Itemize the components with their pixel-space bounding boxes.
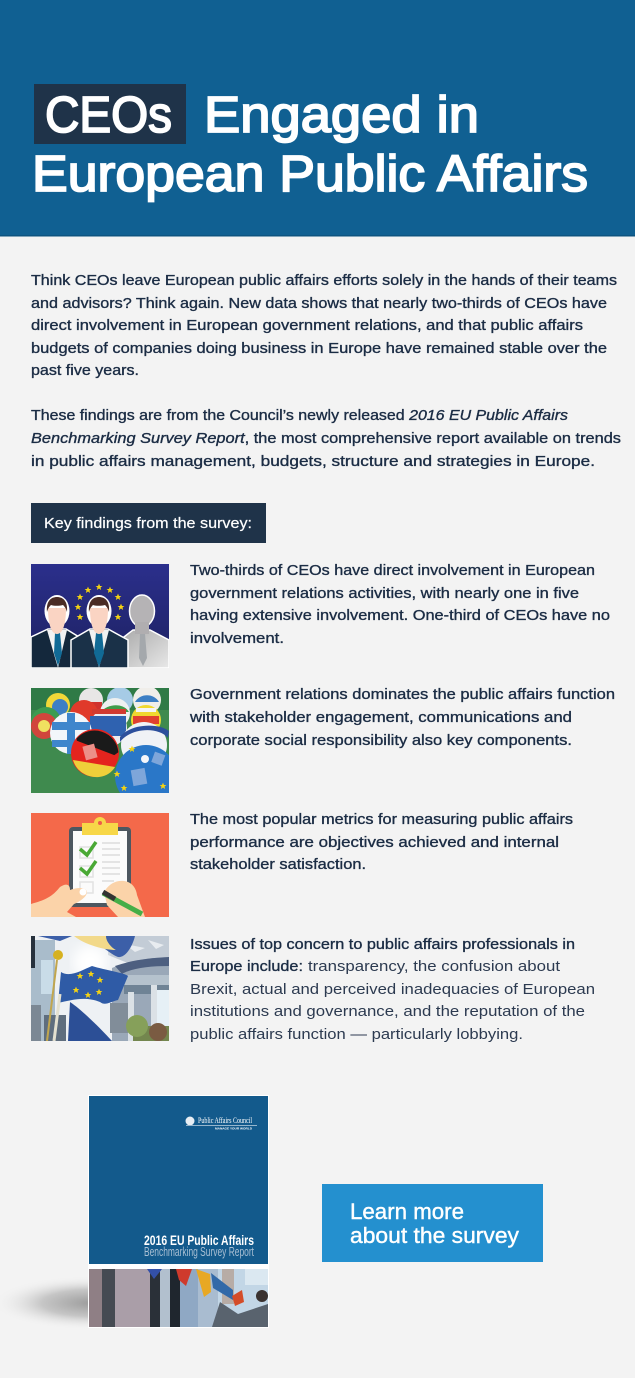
image: flag balls — [31, 688, 169, 793]
right hand — [104, 881, 145, 917]
text: government relations: corporate social responsibility also key components. — [190, 732, 572, 749]
report title — [144, 1233, 254, 1259]
text: metrics: performance are objectives achieved and internal — [190, 834, 559, 851]
title: CEOs — [45, 86, 172, 143]
header banner — [0, 0, 635, 236]
flag lower — [68, 1002, 112, 1041]
text: issues of concern: Brexit, actual and perceived inadequacies of European — [190, 981, 595, 998]
intro paragraph: budgets of companies doing business in Europe have remained stable over the — [31, 340, 607, 357]
text: CEO involvement: involvement. — [190, 630, 284, 647]
report cover — [88, 1095, 269, 1328]
key findings heading — [31, 503, 266, 543]
CEO centre — [71, 595, 128, 668]
intro paragraph: past five years. — [31, 362, 139, 379]
text: issues of concern: Issues of top concern to public affairs professionals in — [190, 936, 575, 953]
text: government relations: Government relations dominates the public affairs function — [190, 686, 615, 703]
book shadow — [0, 1276, 192, 1330]
text: CEO involvement — [190, 562, 610, 647]
title — [32, 84, 588, 202]
flagpoles — [54, 994, 60, 1041]
text: CEO involvement: Two-thirds of CEOs have direct involvement in European — [190, 562, 595, 579]
parliament building — [110, 957, 169, 1041]
button: learn more — [322, 1184, 543, 1262]
title: European Public Affairs — [32, 145, 588, 202]
intro paragraph: Think CEOs leave European public affairs efforts solely in the hands of their teams — [31, 272, 617, 289]
CEO left — [31, 595, 78, 668]
text: issues of concern: Europe include: — [190, 958, 303, 975]
text: government relations — [189, 686, 615, 749]
ghost CEO — [120, 595, 169, 668]
glass tower — [31, 936, 66, 1041]
text: metrics: stakeholder satisfaction. — [190, 856, 366, 873]
report title: Benchmarking Survey Report — [144, 1245, 254, 1259]
text: metrics — [190, 811, 573, 873]
text: CEO involvement: having extensive involvement. One-third of CEOs have no — [190, 607, 610, 624]
key findings heading: Key findings from the survey: — [44, 515, 252, 532]
image: EU flags and parliament — [31, 936, 169, 1041]
cover photo — [89, 1269, 268, 1327]
flag top — [38, 936, 135, 957]
text: metrics: The most popular metrics for measuring public affairs — [190, 811, 573, 828]
survey report paragraph: in public affairs management, budgets, structure and strategies in Europe. — [31, 453, 595, 470]
intro paragraph: direct involvement in European government relations, and that public affairs — [31, 317, 583, 334]
council logo — [186, 1116, 257, 1130]
council logo: MANAGE YOUR WORLD — [215, 1126, 253, 1130]
left hand — [31, 885, 87, 917]
council logo: Public Affairs Council — [198, 1116, 253, 1125]
image: CEOs with EU stars — [31, 564, 169, 668]
text: issues of concern: institutions and governance, and the reputation of the — [190, 1003, 585, 1020]
image: clipboard — [31, 813, 169, 917]
text: issues of concern — [190, 936, 595, 1043]
report title: 2016 EU Public Affairs — [144, 1233, 254, 1248]
survey report paragraph: Benchmarking Survey Report , the most comprehensive report available on trends — [31, 430, 621, 447]
intro paragraph: and advisors? Think again. New data shows that nearly two-thirds of CEOs have — [31, 295, 607, 312]
text: issues of concern: public affairs function — particularly lobbying. — [190, 1026, 523, 1043]
title: Engaged in — [204, 86, 479, 143]
text: CEO involvement: government relations activities, with nearly one in five — [190, 585, 579, 602]
text: government relations: with stakeholder engagement, communications and — [189, 709, 572, 726]
survey report paragraph: These findings are from the Council’s newly released 2016 EU Public Affairs — [31, 407, 569, 424]
survey report paragraph — [31, 407, 621, 470]
pen — [103, 893, 142, 914]
clip — [82, 817, 118, 835]
text: issues of concern: transparency, the confusion about — [308, 958, 561, 975]
button: learn more: about the survey — [350, 1223, 519, 1248]
intro paragraph — [31, 272, 617, 379]
button: learn more: Learn more — [350, 1199, 464, 1224]
flag middle — [58, 966, 128, 1004]
